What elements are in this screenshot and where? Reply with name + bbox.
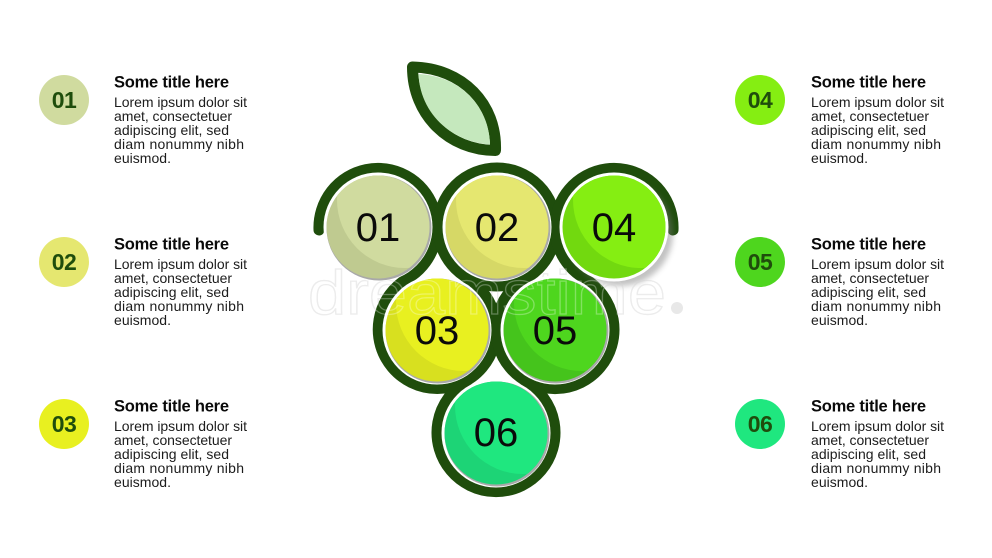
text block 06: euismod.	[811, 474, 868, 490]
text block 03: amet, consectetuer	[114, 432, 232, 448]
text block 01: euismod.	[114, 150, 171, 166]
text block 03: diam nonummy nibh	[114, 460, 244, 476]
grape 04	[560, 172, 676, 289]
badge 03	[39, 399, 89, 449]
text block 01: Lorem ipsum dolor sit	[114, 94, 247, 110]
text block 06: diam nonummy nibh	[811, 460, 941, 476]
text block 04: adipiscing elit, sed	[811, 122, 926, 138]
text block 04: euismod.	[811, 150, 868, 166]
badge 03: 03	[52, 411, 76, 437]
text block 03	[114, 398, 247, 490]
badge 06	[735, 399, 785, 449]
grape 04: 04	[592, 206, 636, 250]
text block 05: euismod.	[811, 312, 868, 328]
grape 02: 02	[475, 206, 519, 250]
text block 04: amet, consectetuer	[811, 108, 929, 124]
text block 04: Some title here	[811, 74, 926, 92]
badge 01: 01	[52, 87, 77, 113]
text block 02: amet, consectetuer	[114, 270, 232, 286]
text block 02	[114, 236, 247, 328]
item 06	[735, 398, 944, 490]
badge 04: 04	[748, 87, 773, 113]
watermark: dreamstime	[308, 259, 666, 328]
text block 06	[811, 398, 944, 490]
badge 06: 06	[748, 411, 772, 437]
item 05	[735, 236, 944, 328]
item 02	[39, 236, 247, 328]
text block 03: Some title here	[114, 398, 229, 416]
badge 02: 02	[52, 249, 76, 275]
grape 06	[442, 382, 550, 488]
watermark overlay: dreamstime	[308, 259, 666, 328]
text block 01	[114, 74, 247, 166]
grape 05: 05	[533, 309, 577, 353]
text block 01: adipiscing elit, sed	[114, 122, 229, 138]
text block 03: adipiscing elit, sed	[114, 446, 229, 462]
text block 04: diam nonummy nibh	[811, 136, 941, 152]
text block 02: Lorem ipsum dolor sit	[114, 256, 247, 272]
text block 03: euismod.	[114, 474, 171, 490]
grape 03	[382, 278, 492, 384]
grape 06: 06	[474, 411, 518, 455]
grape 05	[500, 276, 610, 384]
text block 06: Some title here	[811, 398, 926, 416]
item 01	[39, 74, 247, 166]
badge 02	[39, 237, 89, 287]
item 03	[39, 398, 247, 490]
grape 01	[324, 172, 432, 282]
text block 05: Lorem ipsum dolor sit	[811, 256, 944, 272]
grape 02	[442, 172, 552, 282]
text block 02: Some title here	[114, 236, 229, 254]
badge 05	[735, 237, 785, 287]
text block 01: Some title here	[114, 74, 229, 92]
text block 05: diam nonummy nibh	[811, 298, 941, 314]
text block 06: adipiscing elit, sed	[811, 446, 926, 462]
text block 05: Some title here	[811, 236, 926, 254]
item 04	[735, 74, 944, 166]
badge 04	[735, 75, 785, 125]
icon: leaf	[412, 67, 496, 150]
text block 04	[811, 74, 944, 166]
text block 06: amet, consectetuer	[811, 432, 929, 448]
text block 02: adipiscing elit, sed	[114, 284, 229, 300]
grape illustration	[319, 67, 709, 492]
text block 04: Lorem ipsum dolor sit	[811, 94, 944, 110]
text block 01: diam nonummy nibh	[114, 136, 244, 152]
text block 03: Lorem ipsum dolor sit	[114, 418, 247, 434]
text block 02: diam nonummy nibh	[114, 298, 244, 314]
text block 05: amet, consectetuer	[811, 270, 929, 286]
text block 05: adipiscing elit, sed	[811, 284, 926, 300]
grape 01: 01	[356, 206, 400, 250]
grape 03: 03	[415, 309, 459, 353]
text block 05	[811, 236, 944, 328]
grape cluster outline	[319, 168, 673, 492]
badge 05: 05	[748, 249, 773, 275]
text block 06: Lorem ipsum dolor sit	[811, 418, 944, 434]
text block 01: amet, consectetuer	[114, 108, 232, 124]
text block 02: euismod.	[114, 312, 171, 328]
badge 01	[39, 75, 89, 125]
